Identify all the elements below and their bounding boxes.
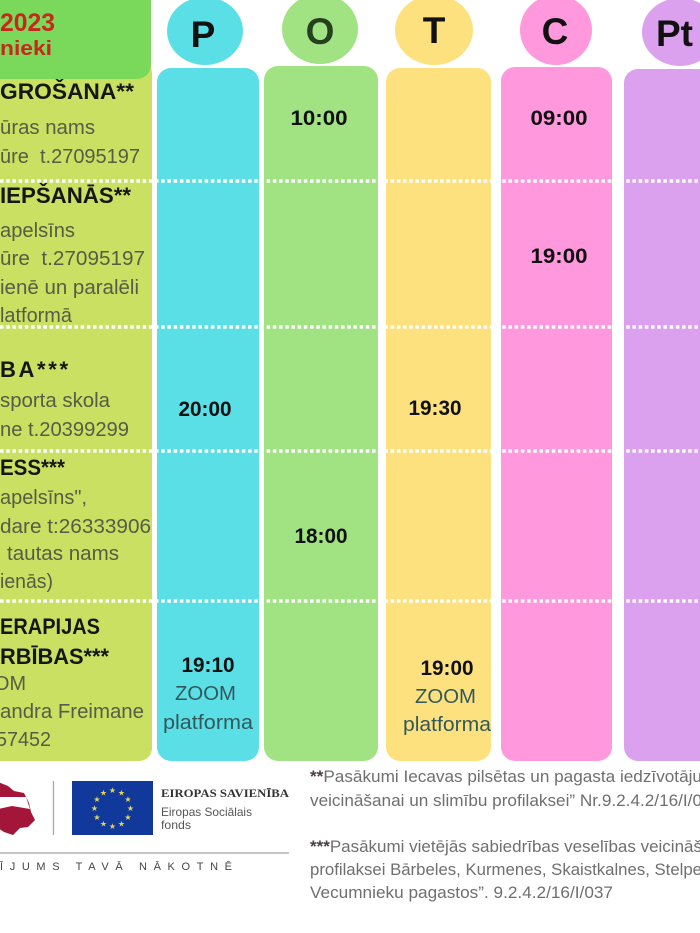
activity: joga: BA*** (0, 357, 68, 382)
logo text: EU: fonds (161, 818, 191, 832)
column: T (386, 0, 492, 761)
footnote: three stars: profilaksei Bārbeles, Kurmenes, Skaistkalnes, Stelpe (310, 861, 700, 879)
activity: fitness: apelsīns", (0, 487, 87, 509)
times P: platforma (163, 712, 254, 734)
times O: 10:00 (290, 107, 348, 130)
slogan: ĪJUMS TAVĀ NĀKOTNĒ (0, 861, 232, 873)
activity: joga (0, 357, 129, 441)
activity: vingrošana: latformā (0, 305, 73, 327)
activity: grozīšana (0, 79, 140, 168)
times O: 18:00 (294, 525, 348, 548)
activity: terapijas: RBĪBAS*** (0, 644, 109, 669)
activity: vingrošana: ienē un paralēli (0, 277, 139, 299)
times T (403, 397, 492, 736)
activity: grozīšana: ūre t.27095197 (0, 146, 140, 168)
day badge C (520, 0, 592, 65)
times P: ZOOM (175, 683, 236, 705)
logo text: EU: Eiropas Sociālais (161, 805, 252, 819)
footnote: three stars: Vecumnieku pagastos”. 9.2.4.2/16/I/037 (310, 884, 613, 902)
logo: EU flag: ★ (127, 804, 134, 813)
times T: ZOOM (415, 686, 476, 708)
footnote: two stars: veicināšanai un slimību profilaksei” Nr.9.2.4.2/16/I/0 (310, 792, 700, 810)
activity: terapijas: andra Freimane (0, 701, 144, 723)
logo: EU flag: ★ (118, 788, 125, 798)
footnote: two stars: **Pasākumi Iecavas pilsētas un pagasta iedzīvotāju (310, 768, 700, 786)
activity: vingrošana (0, 183, 145, 327)
times T: 19:00 (420, 657, 474, 680)
column: C (501, 0, 612, 761)
activity: fitness: dare t:26333906 (0, 516, 151, 538)
logo: EU flag: ★ (100, 788, 107, 798)
day badge T (395, 0, 473, 65)
footnote: three stars (310, 838, 700, 902)
activity: grozīšana: ūras nams (0, 117, 95, 139)
heading panel: 2023 (0, 9, 55, 37)
column: P (157, 0, 259, 761)
times C: 09:00 (530, 107, 588, 130)
day badge P: P (191, 14, 215, 55)
column: O (264, 0, 378, 761)
heading panel (0, 0, 151, 79)
footnote: two stars (310, 768, 700, 810)
day badge O (282, 0, 358, 64)
activity: fitness (0, 455, 151, 593)
times T: platforma (403, 714, 492, 736)
day badge P (167, 0, 243, 65)
footnote: three stars: ***Pasākumi vietējās sabiedrības veselības veicināš (310, 838, 700, 856)
logo: EU flag: ★ (109, 786, 116, 795)
activity: fitness: ienās) (0, 571, 53, 593)
activity: fitness: ESS*** (0, 455, 65, 480)
day badge Pt: Pt (656, 13, 693, 54)
times C: 19:00 (530, 245, 588, 268)
logo: EU flag: ★ (100, 820, 107, 828)
logo: EU flag: ★ (118, 820, 125, 828)
heading panel: nieki (0, 38, 52, 60)
day badge T: T (423, 10, 446, 51)
logo text: EU: EIROPAS SAVIENĪBA (161, 786, 289, 800)
logo: EU flag: ★ (124, 813, 132, 822)
times P: 19:10 (182, 654, 234, 677)
times O (290, 107, 348, 548)
activity: grozīšana: GROŠANA** (0, 79, 134, 104)
times P (163, 398, 254, 734)
day badge C: C (542, 11, 568, 52)
logo: EU flag: ★ (91, 804, 98, 813)
activity: joga: ne t.20399299 (0, 419, 129, 441)
times P: 20:00 (178, 398, 232, 421)
activity: terapijas (0, 614, 144, 751)
logo: EU flag (54, 781, 153, 835)
logo: EU flag: ★ (109, 822, 116, 831)
activity: fitness: tautas nams (7, 543, 119, 565)
day badge O: O (306, 11, 334, 52)
activity: vingrošana: ūre t.27095197 (0, 248, 145, 270)
activity: joga: sporta skola (0, 390, 111, 412)
panel: activities column (0, 60, 152, 761)
activity: terapijas: ERAPIJAS (0, 614, 100, 639)
logo: EU flag: ★ (93, 795, 101, 804)
logo: Latvia map (0, 782, 35, 835)
activity: vingrošana: IEPŠANĀS** (0, 183, 131, 208)
times C (530, 107, 588, 268)
times T: 19:30 (408, 397, 462, 420)
column: Pt (624, 0, 700, 761)
logo: EU flag: ★ (93, 813, 101, 822)
day badge Pt (642, 0, 700, 66)
logo: EU flag: ★ (124, 795, 132, 804)
activity: vingrošana: apelsīns (0, 220, 75, 242)
logo text: EU (161, 786, 289, 832)
